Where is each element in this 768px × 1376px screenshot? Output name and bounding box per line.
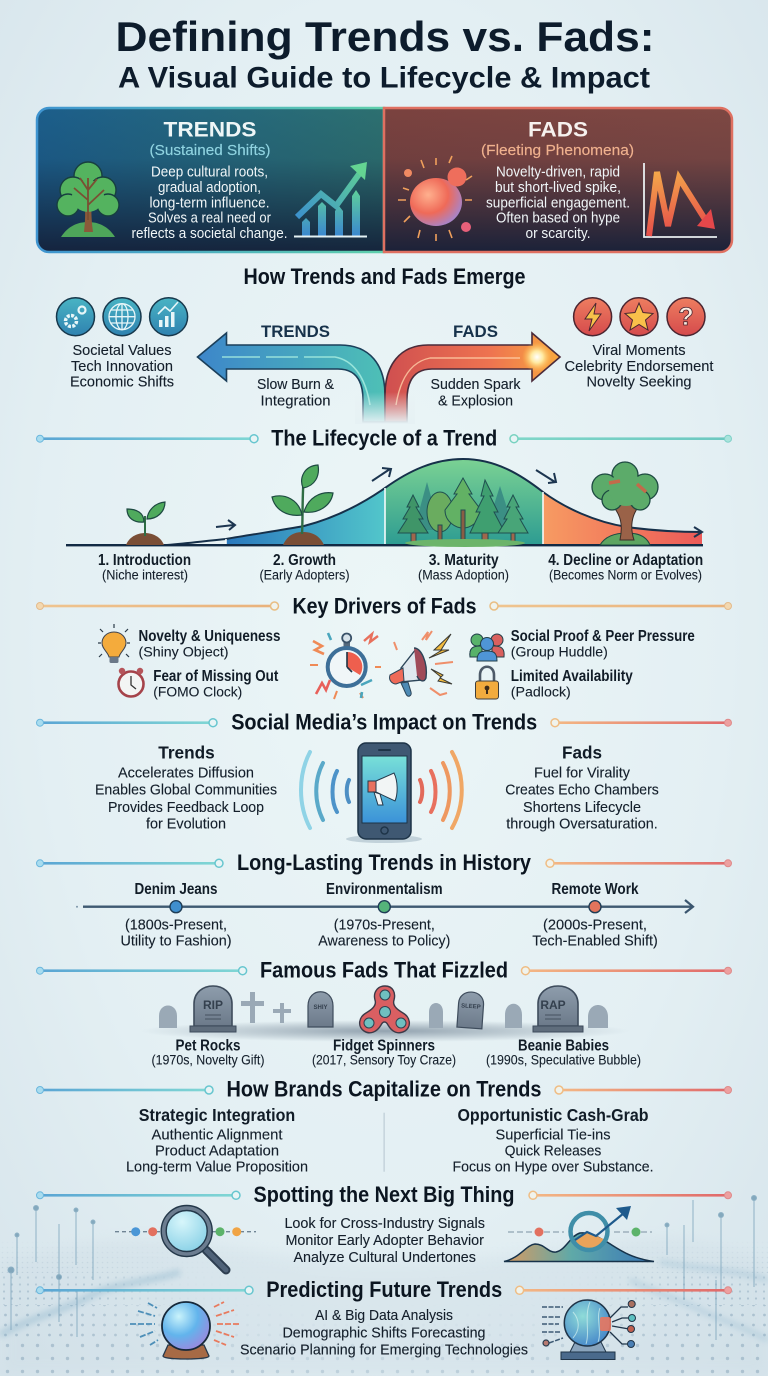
text: social media effect on fads [505,743,659,832]
heading: long-lasting trends in history [36,850,732,875]
text: strategic integration: Long-term Value Proposition [126,1159,308,1176]
text: strategic integration: Product Adaptation [155,1143,279,1160]
panel: trends: Solves a real need or [148,211,271,227]
lifecycle stage labels [98,552,703,583]
panel: trends: Deep cultural roots, [151,164,268,180]
text: trend sources: Tech Innovation [71,358,173,375]
text: social media effect on trends: Provides Feedback Loop [108,799,264,816]
driver: fear of missing out [118,668,278,701]
text: prediction methods: AI & Big Data Analysis [315,1307,453,1324]
text: social media effect on trends: Enables Global Communities [95,782,277,799]
panel: trends: reflects a societal change. [132,226,288,242]
text: social media effect on trends: Trends [158,743,215,763]
heading: how brands capitalize on trends [36,1077,732,1102]
lifecycle stage labels: 3. Maturity [429,552,499,569]
heading: social media's impact on trends: Social Media’s Impact on Trends [231,709,537,734]
icon: trend lens over mountain [504,1206,654,1262]
timeline item: environmentalism: Environmentalism [326,881,443,898]
icon: magnifying glass [115,1206,256,1270]
driver: limited availability: (Padlock) [511,685,571,701]
driver: novelty: Novelty & Uniqueness [138,628,281,645]
icon: crystal ball [130,1302,240,1359]
text: social media effect on fads: Shortens Lifecycle [523,799,641,816]
icon: mature forest [398,478,528,547]
driver: social proof [470,628,695,661]
arrow: fads branch: & Explosion [438,393,513,410]
tombstone: SHIY [308,992,333,1027]
driver: limited availability: Limited Availability [511,668,633,685]
text: trend sources: Economic Shifts [70,374,174,391]
driver: fear of missing out: Fear of Missing Out [153,668,278,685]
driver: limited availability [476,667,633,701]
heading: famous fads that fizzled [36,957,732,982]
panel: fads: Often based on hype [496,211,620,227]
icon: bursting bubble [398,156,472,241]
icon: megaphone and lightning [390,631,453,696]
timeline item: denim jeans: Utility to Fashion) [120,933,232,950]
icon: tree [57,162,119,237]
heading: predicting future trends [36,1277,732,1302]
heading: key drivers of fads [36,593,732,618]
text: social media effect on fads: Fuel for Virality [534,764,630,781]
text: spotting signals [284,1215,485,1266]
heading: the lifecycle of a trend [36,425,732,450]
fad labels: Beanie Babies [518,1038,609,1055]
arrow: trends branch: TRENDS [261,323,330,341]
text: social media effect on fads: Fads [562,743,602,763]
timeline item: environmentalism [318,881,450,950]
panel: fads: but short-lived spike, [495,180,621,196]
text: social media effect on trends: for Evolution [146,815,226,832]
heading: long-lasting trends in history: Long-Lasting Trends in History [237,850,532,875]
text: strategic integration [126,1105,308,1176]
panel: fads: or scarcity. [526,226,590,242]
icon: stopwatch and sparks [310,633,381,699]
text: prediction methods: Demographic Shifts Forecasting [282,1324,486,1341]
title: Defining Trends vs. Fads: [116,13,654,60]
driver: social proof: (Group Huddle) [511,645,608,661]
text: social media effect on fads: through Oversaturation. [506,815,658,832]
arrow: fads branch [385,323,560,422]
title: A Visual Guide to Lifecycle & Impact [118,62,650,94]
fad labels: Fidget Spinners [333,1038,435,1055]
icon: smartphone with signal waves [301,743,462,843]
text: strategic integration: Authentic Alignment [152,1126,283,1143]
chart: lifecycle curve [66,459,703,547]
driver: social proof: Social Proof & Peer Pressure [511,628,695,645]
text: social media effect on fads: Creates Echo Chambers [505,782,659,799]
icons: societal, tech, economic [56,298,188,336]
text: strategic integration: Strategic Integration [139,1105,295,1125]
text: opportunistic cash-grab: Opportunistic Cash-Grab [458,1105,648,1125]
tombstone: RAP [533,986,583,1032]
panel: fads [384,108,732,252]
lifecycle stage labels: (Mass Adoption) [418,567,509,583]
timeline item: remote work [532,881,658,950]
heading: predicting future trends: Predicting Future Trends [266,1277,502,1302]
text: fad sources [564,342,714,391]
lifecycle stage labels: 2. Growth [273,552,336,569]
text: opportunistic cash-grab: Focus on Hype over Substance. [452,1159,654,1176]
panel: trends: TRENDS [164,118,256,142]
timeline item: denim jeans: (1800s-Present, [125,916,227,933]
icon: young plant [272,465,333,545]
text: opportunistic cash-grab: Superficial Tie-ins [496,1126,611,1143]
fad labels: (1970s, Novelty Gift) [152,1053,264,1069]
text: trend sources [70,342,174,391]
tombstone: tilted small: SLEEP [461,1003,481,1011]
lifecycle stage labels: (Niche interest) [102,567,188,583]
lifecycle stage labels: 4. Decline or Adaptation [548,552,703,569]
text: social media effect on trends [95,743,277,832]
heading: famous fads that fizzled: Famous Fads That Fizzled [260,957,508,982]
panel: fads: Novelty-driven, rapid [496,164,620,180]
text: social media effect on trends: Accelerates Diffusion [118,764,254,781]
tombstone: RAP: RAP [540,998,566,1012]
heading: key drivers of fads: Key Drivers of Fads [292,593,476,618]
timeline [76,881,693,950]
panel: fads: FADS [528,118,588,142]
driver: novelty [98,624,281,663]
text: fad sources: Viral Moments [592,342,686,359]
icon: AI globe [542,1300,636,1360]
text: opportunistic cash-grab: Quick Releases [505,1143,602,1160]
icons: viral, celebrity, novelty [574,298,705,336]
lifecycle stage labels: (Becomes Norm or Evolves) [549,567,702,583]
timeline item: remote work: Remote Work [552,881,639,898]
fad labels: (2017, Sensory Toy Craze) [312,1053,456,1069]
panel: trends: long-term influence. [150,195,270,211]
heading: how trends and fads emerge: How Trends and Fads Emerge [244,264,526,289]
text: prediction methods: Scenario Planning for Emerging Technologies [240,1341,528,1358]
tombstone: RIP: RIP [203,998,223,1012]
heading: spotting the next big thing [36,1182,732,1207]
arrow: fads branch: Sudden Spark [430,376,521,393]
fad labels [152,1038,641,1069]
timeline item: denim jeans: Denim Jeans [134,881,218,898]
heading: spotting the next big thing: Spotting the Next Big Thing [254,1182,514,1207]
tombstone: tilted small [457,991,484,1029]
text: trend sources: Societal Values [72,342,172,359]
background: dotted data landscape [0,1196,768,1376]
icon: fidget spinner [360,986,409,1033]
panel: fads: (Fleeting Phenomena) [481,142,634,159]
timeline item: remote work: (2000s-Present, [543,916,647,933]
timeline item: remote work: Tech-Enabled Shift) [532,933,658,950]
text: spotting signals: Analyze Cultural Undertones [293,1249,476,1266]
icon: rising bar chart [294,162,367,238]
icons: viral, celebrity, novelty: ? [678,303,694,331]
driver: fear of missing out: (FOMO Clock) [153,685,242,701]
timeline item: environmentalism: (1970s-Present, [334,916,435,933]
arrow: fads branch: FADS [453,323,498,341]
fad labels: (1990s, Speculative Bubble) [486,1053,641,1069]
panel: trends: gradual adoption, [158,180,261,196]
text: spotting signals: Monitor Early Adopter Behavior [285,1232,484,1249]
icon: declining tree [592,462,658,545]
lifecycle stage labels: (Early Adopters) [260,567,350,583]
lifecycle stage labels: 1. Introduction [98,552,191,569]
heading: how brands capitalize on trends: How Brands Capitalize on Trends [226,1077,542,1102]
text: fad sources: Novelty Seeking [586,374,692,391]
text: opportunistic cash-grab [452,1105,654,1176]
panel: trends vs fads comparison [37,108,732,252]
tombstone: RIP [190,986,236,1032]
arrow: trends branch: Integration [260,393,330,410]
icon: crash chart [644,163,717,237]
tombstone: SHIY: SHIY [313,1005,328,1011]
driver: novelty: (Shiny Object) [138,645,228,661]
text: fad sources: Celebrity Endorsement [564,358,714,375]
illustration: fad graveyard [140,986,630,1042]
fad labels: Pet Rocks [176,1038,241,1055]
text: spotting signals: Look for Cross-Industry Signals [284,1215,485,1232]
timeline item: denim jeans [120,881,232,950]
text: prediction methods [240,1307,528,1358]
heading: the lifecycle of a trend: The Lifecycle of a Trend [271,425,497,450]
panel: fads: superficial engagement. [486,195,630,211]
panel: trends: (Sustained Shifts) [150,142,271,159]
title [116,13,654,94]
arrow: trends branch [198,323,385,422]
icon: sprout [126,502,165,545]
heading: social media's impact on trends [36,709,732,734]
panel: trends [37,108,384,252]
arrow: trends branch: Slow Burn & [257,376,334,393]
timeline item: environmentalism: Awareness to Policy) [318,933,450,950]
